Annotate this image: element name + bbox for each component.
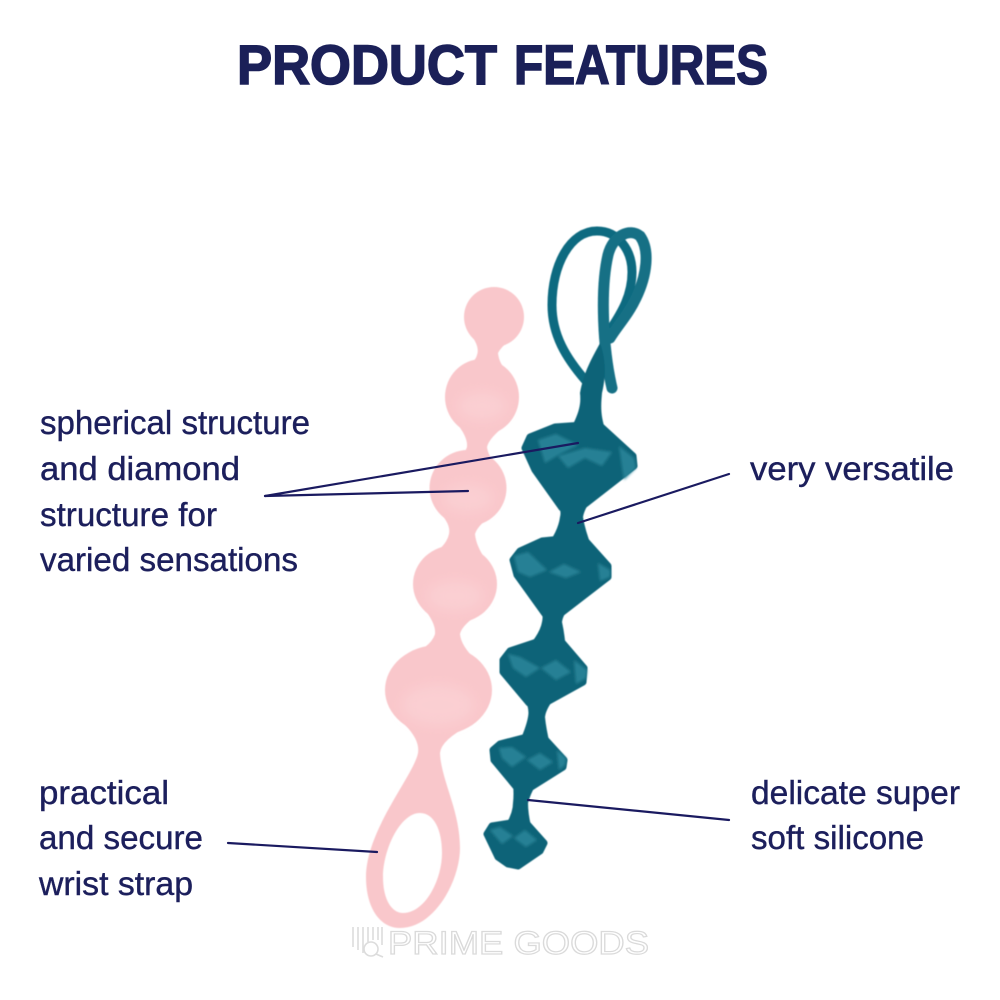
pink product: round beads with wrist strap	[366, 287, 524, 928]
callout: silicone: delicate super	[751, 774, 960, 811]
callout: silicone: soft silicone	[751, 819, 924, 856]
diamond facets	[490, 434, 636, 847]
loop: large strap	[552, 231, 632, 381]
callout: spherical and diamond structure: structure for	[40, 496, 217, 533]
loop: narrow strap	[603, 233, 646, 388]
callout: spherical and diamond structure: and diamond	[40, 450, 240, 487]
stem and diamond chain	[487, 424, 634, 866]
callout: silicone	[528, 774, 960, 856]
callout: wrist strap: wrist strap	[38, 865, 193, 902]
watermark: PRIME GOODS	[388, 925, 649, 961]
callout: wrist strap: and secure	[39, 819, 203, 856]
callout: spherical and diamond structure: spherical structure	[40, 404, 310, 441]
callout: spherical and diamond structure	[40, 404, 578, 578]
callout: wrist strap: practical	[39, 774, 169, 811]
callout: spherical and diamond structure: varied sensations	[40, 541, 298, 578]
icon: barcode magnifier	[353, 927, 383, 957]
teal product: diamond beads with loop	[487, 231, 646, 866]
title	[237, 33, 768, 96]
title: FEATURES	[514, 33, 768, 96]
callout: very versatile: very versatile	[750, 450, 954, 487]
title: PRODUCT	[237, 33, 497, 96]
callout: very versatile	[578, 450, 954, 523]
callout: wrist strap	[38, 774, 377, 902]
